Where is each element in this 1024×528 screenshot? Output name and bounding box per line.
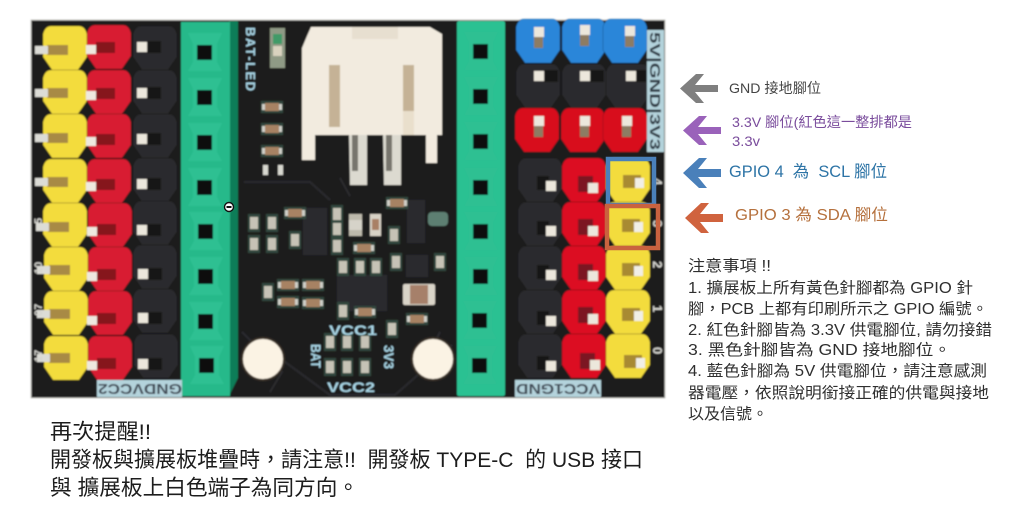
BAT-LED silk and LED: BAT-LED [243, 27, 258, 91]
bottom left pin label: GNDVCC2 [98, 380, 182, 397]
GPIO numbers [33, 178, 665, 362]
label: SDA: GPIO 3 為 SDA 腳位 [735, 206, 888, 224]
PCB [31, 20, 665, 398]
right pin label [646, 30, 664, 152]
notes: 1. 擴展板上所有黃色針腳都為 GPIO 針 [688, 278, 973, 297]
blue 5V header [516, 19, 647, 63]
black GND header row [516, 64, 650, 108]
VCC silk labels: BAT [308, 344, 324, 368]
label: GND: GND 接地腳位 [729, 80, 821, 96]
notes: 3. 黑色針腳皆為 GND 接地腳位。 [688, 341, 951, 359]
right pin label: 5V|GND|3V3 [646, 32, 663, 150]
left black header [133, 26, 178, 378]
highlight: SCL box [608, 159, 654, 205]
label: 3.3V: 3.3V 腳位(紅色這一整排都是 [732, 114, 912, 130]
mounting holes [242, 338, 454, 380]
VCC silk labels: 3V3 [381, 345, 397, 369]
reminder [50, 420, 643, 500]
reminder: 再次提醒!! [50, 420, 151, 444]
white battery connector [302, 27, 442, 185]
GPIO numbers: 10 [33, 262, 45, 274]
notes [688, 256, 992, 423]
reminder: 與 擴展板上白色端子為同方向。 [50, 476, 359, 500]
PCB outlines [242, 178, 452, 395]
label: 3.3V: 3.3v [732, 133, 760, 149]
label: SCL: GPIO 4 為 SCL 腳位 [729, 162, 887, 181]
VCC silk labels [308, 322, 397, 395]
GPIO numbers: 0 [650, 347, 665, 354]
notes: 器電壓，依照說明銜接正確的供電與接地 [688, 384, 989, 402]
notes: 注意事項 !! [688, 256, 771, 275]
red 3.3V header row [515, 108, 647, 152]
GPIO numbers: 2 [650, 261, 665, 268]
lower right black column [518, 158, 562, 378]
VCC silk labels: VCC2 [327, 379, 375, 395]
notes: 以及信號。 [688, 405, 768, 423]
small SMD parts [248, 197, 448, 376]
VCC silk labels: VCC1 [329, 322, 377, 338]
GPIO numbers: 3 [650, 220, 665, 227]
BAT-LED silk and LED [243, 27, 285, 91]
notes: 4. 藍色針腳為 5V 供電腳位，請注意感測 [688, 361, 987, 380]
GPIO numbers: 4 [650, 178, 665, 186]
right green socket [457, 21, 505, 396]
GPIO numbers: 1 [650, 305, 665, 312]
cursor icon [224, 202, 234, 212]
ICs [303, 200, 428, 311]
GPIO numbers: 5 [33, 218, 45, 224]
reminder: 開發板與擴展板堆疊時，請注意!! 開發板 TYPE-C 的 USB 接口 [50, 448, 643, 472]
arrow: 3.3V [683, 116, 721, 145]
label: 3.3V [732, 114, 912, 149]
arrow: SDA [685, 203, 723, 233]
arrow: SCL [683, 158, 721, 188]
left yellow header [35, 26, 88, 380]
highlight: SDA box [607, 206, 658, 248]
left green socket [181, 21, 238, 396]
lower right red column [562, 158, 606, 378]
arrow: GND [680, 74, 718, 103]
notes: 2. 紅色針腳皆為 3.3V 供電腳位, 請勿接錯 [688, 321, 992, 339]
GPIO numbers: 07 [33, 304, 45, 316]
left red header [86, 25, 132, 380]
GPIO numbers: 17 [33, 350, 45, 362]
board photo [31, 19, 665, 398]
lower right yellow column [606, 158, 650, 378]
bottom right pin label: VCC1GND [516, 380, 600, 397]
upper resistors [261, 101, 283, 175]
notes: 腳，PCB 上都有印刷所示之 GPIO 編號。 [688, 300, 988, 318]
